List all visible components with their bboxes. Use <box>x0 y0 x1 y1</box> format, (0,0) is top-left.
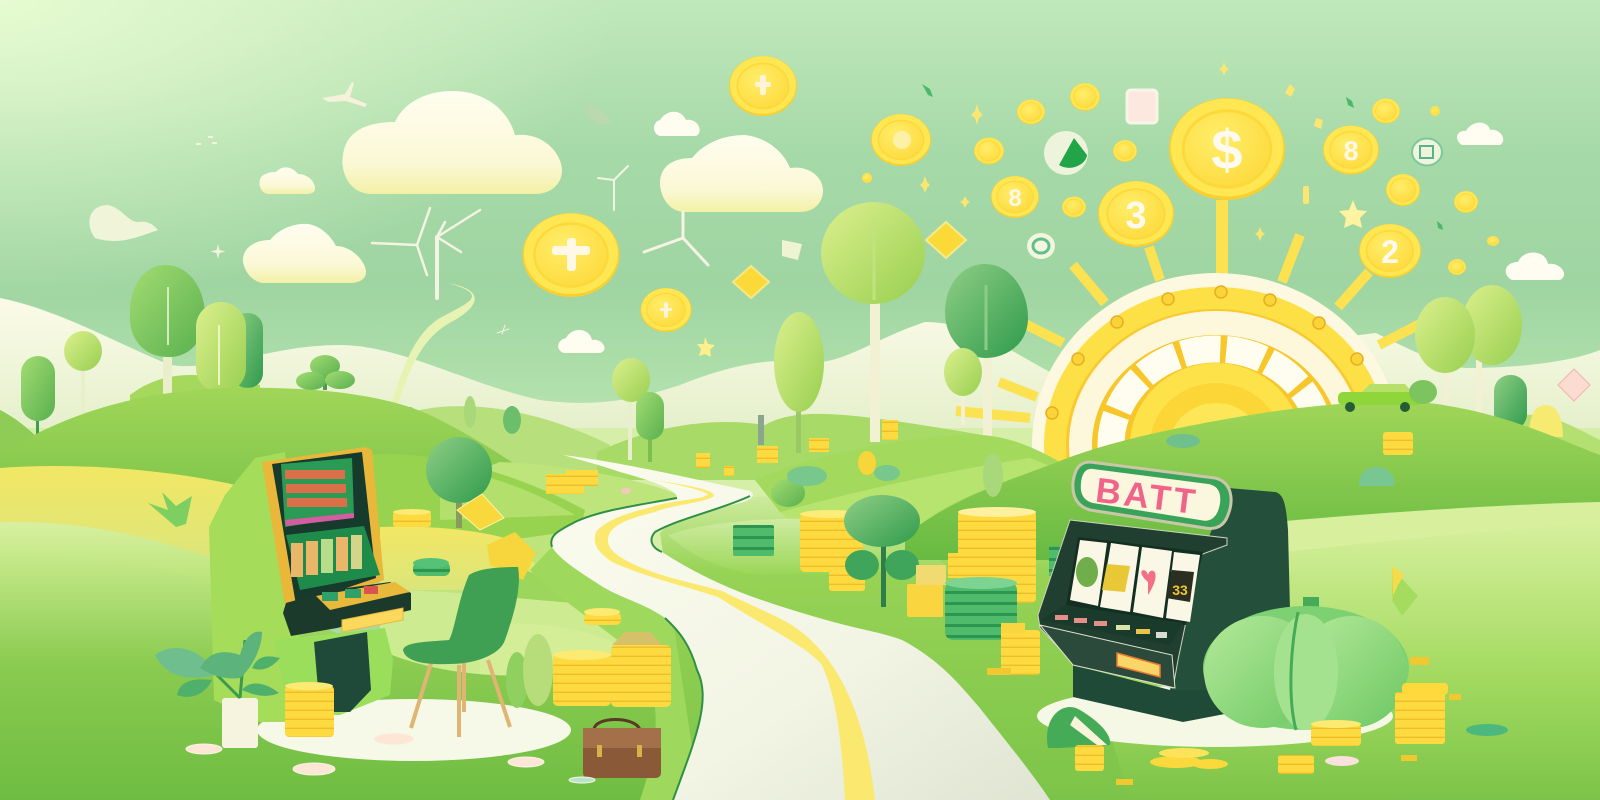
stack: coins by machine <box>987 623 1040 675</box>
airplane and distant specks <box>196 82 367 259</box>
mid hills center <box>668 435 1060 575</box>
clouds <box>89 91 1564 353</box>
coin: 8 right: 8 <box>1343 136 1359 166</box>
tree: left capsule <box>774 312 824 453</box>
coin: small <box>640 288 692 332</box>
token: yellow diamond <box>926 222 966 258</box>
coin: 8 left <box>991 176 1039 218</box>
tree: light capsule <box>196 302 246 393</box>
upper screen <box>281 458 354 527</box>
reels <box>1066 537 1203 625</box>
trees mid <box>612 358 664 462</box>
far cream hills <box>0 298 1600 520</box>
coin: plus <box>522 213 620 297</box>
green strip left of road <box>530 547 701 800</box>
foreground left ground <box>0 555 701 800</box>
coin: small group <box>862 83 1499 275</box>
hill behind left trees <box>130 375 260 420</box>
cloud: large <box>342 91 562 194</box>
poker chips on ground <box>186 733 595 783</box>
wheel rivets <box>1046 286 1363 419</box>
block: yellow <box>457 494 504 530</box>
platform <box>257 699 571 761</box>
cloud: small top <box>654 112 700 136</box>
tree: small <box>64 331 102 413</box>
pink chip <box>621 488 631 494</box>
lower screen <box>286 526 380 590</box>
wind turbines <box>372 166 708 334</box>
cloud: lower left <box>243 224 366 283</box>
platform <box>1037 685 1393 747</box>
tree: three ball <box>844 495 920 607</box>
stack: coin short <box>829 567 865 591</box>
cabinet front <box>1038 520 1227 688</box>
coin: 3 <box>1098 181 1174 247</box>
coin pad <box>584 608 621 625</box>
cabinet base <box>1073 665 1230 722</box>
block: gold <box>487 532 536 580</box>
green cabinet <box>209 452 300 722</box>
cloud: wisp <box>89 205 158 241</box>
floating coins cluster <box>862 62 1499 275</box>
car <box>1338 380 1437 412</box>
floating coins left <box>522 56 802 357</box>
stand <box>274 628 393 715</box>
diamond: pink <box>1558 369 1590 401</box>
stack: gold tall <box>958 507 1036 603</box>
cabinet rear <box>1170 488 1290 713</box>
cloud: small bottom <box>558 330 605 353</box>
big right green hill <box>905 402 1600 560</box>
briefcase <box>583 720 661 778</box>
tree: small light <box>944 348 982 425</box>
cloud: far right <box>1506 252 1564 280</box>
stack: chips small <box>1049 546 1061 576</box>
floor left of road <box>400 462 700 700</box>
coin: 2: 2 <box>1381 234 1399 270</box>
diamond token <box>733 266 769 298</box>
mid right props <box>696 420 1003 507</box>
trees: right pair <box>1415 285 1522 415</box>
coin: 8 right <box>1323 126 1379 174</box>
coin: dollar <box>1169 98 1285 200</box>
left hills <box>0 388 700 700</box>
left trees <box>21 265 664 462</box>
chips: green <box>413 558 450 576</box>
mounds and hill coins <box>1166 432 1418 616</box>
coin: 1 big <box>871 114 931 166</box>
small sparkles <box>920 62 1367 241</box>
coin stack <box>285 682 334 737</box>
tree: large light <box>821 202 925 442</box>
token: spiral <box>1027 233 1055 259</box>
flag token <box>1047 707 1110 748</box>
road edges <box>551 496 750 800</box>
reels: 33 <box>1172 582 1188 598</box>
sky background <box>0 0 1600 520</box>
sign: BATT <box>1093 471 1200 522</box>
spike plant <box>506 634 553 708</box>
paper tag <box>586 103 612 124</box>
ball: green <box>1044 131 1088 175</box>
stack: green chips <box>945 577 1017 640</box>
bush <box>296 355 355 390</box>
pumpkin <box>1203 597 1409 730</box>
plant <box>155 632 280 748</box>
stack: gold wide <box>800 510 863 572</box>
coin: 2 <box>1359 224 1421 278</box>
sign <box>1073 462 1231 528</box>
blob: yellow <box>1529 405 1563 437</box>
token: teal square <box>1412 138 1442 166</box>
capsule: far right <box>1494 375 1527 430</box>
lower panel <box>1040 625 1175 688</box>
coin: 3: 3 <box>1125 195 1147 237</box>
trail on hill <box>390 283 475 410</box>
wheel rays <box>956 200 1428 418</box>
wheel body <box>1032 273 1400 617</box>
road center line <box>595 478 875 800</box>
coin: top <box>729 56 797 116</box>
stack: near road <box>546 470 598 494</box>
money piles center <box>733 495 1061 675</box>
cloud: right <box>660 135 823 212</box>
cloud: small left <box>260 167 315 194</box>
console <box>283 582 411 636</box>
blocks: gold <box>907 553 962 617</box>
left props on hills <box>148 437 631 580</box>
lit slot <box>1117 653 1160 677</box>
tree: dark <box>945 264 1028 460</box>
console <box>1040 605 1183 645</box>
stack: coins <box>393 509 431 527</box>
right ground <box>660 496 1600 800</box>
grass tuft <box>148 492 192 527</box>
center and right trees <box>403 202 1590 460</box>
green chips <box>922 84 1443 230</box>
coin: dollar: $ <box>1211 118 1243 181</box>
stack: green left <box>733 525 774 556</box>
road <box>551 455 1050 800</box>
coin stacks <box>553 632 671 707</box>
wheel sun <box>956 98 1428 617</box>
gold frame <box>262 447 384 625</box>
right pale foreground hills <box>1100 502 1600 800</box>
tree: round <box>426 437 492 528</box>
cloud: right small <box>1457 123 1503 145</box>
chair <box>403 567 519 737</box>
coin stacks near pumpkin <box>1075 657 1508 785</box>
coin: 8 left: 8 <box>1008 185 1022 212</box>
tree: capsule <box>21 356 55 435</box>
tree: left tall <box>130 265 205 400</box>
paper tag right <box>782 240 802 260</box>
right slot machine <box>1037 462 1508 785</box>
left slot machine <box>155 447 671 783</box>
far green hills <box>0 406 1600 563</box>
far hill props <box>403 396 764 445</box>
star <box>697 337 715 357</box>
tree: dark capsule <box>232 313 263 388</box>
tag: pink <box>1127 90 1157 123</box>
